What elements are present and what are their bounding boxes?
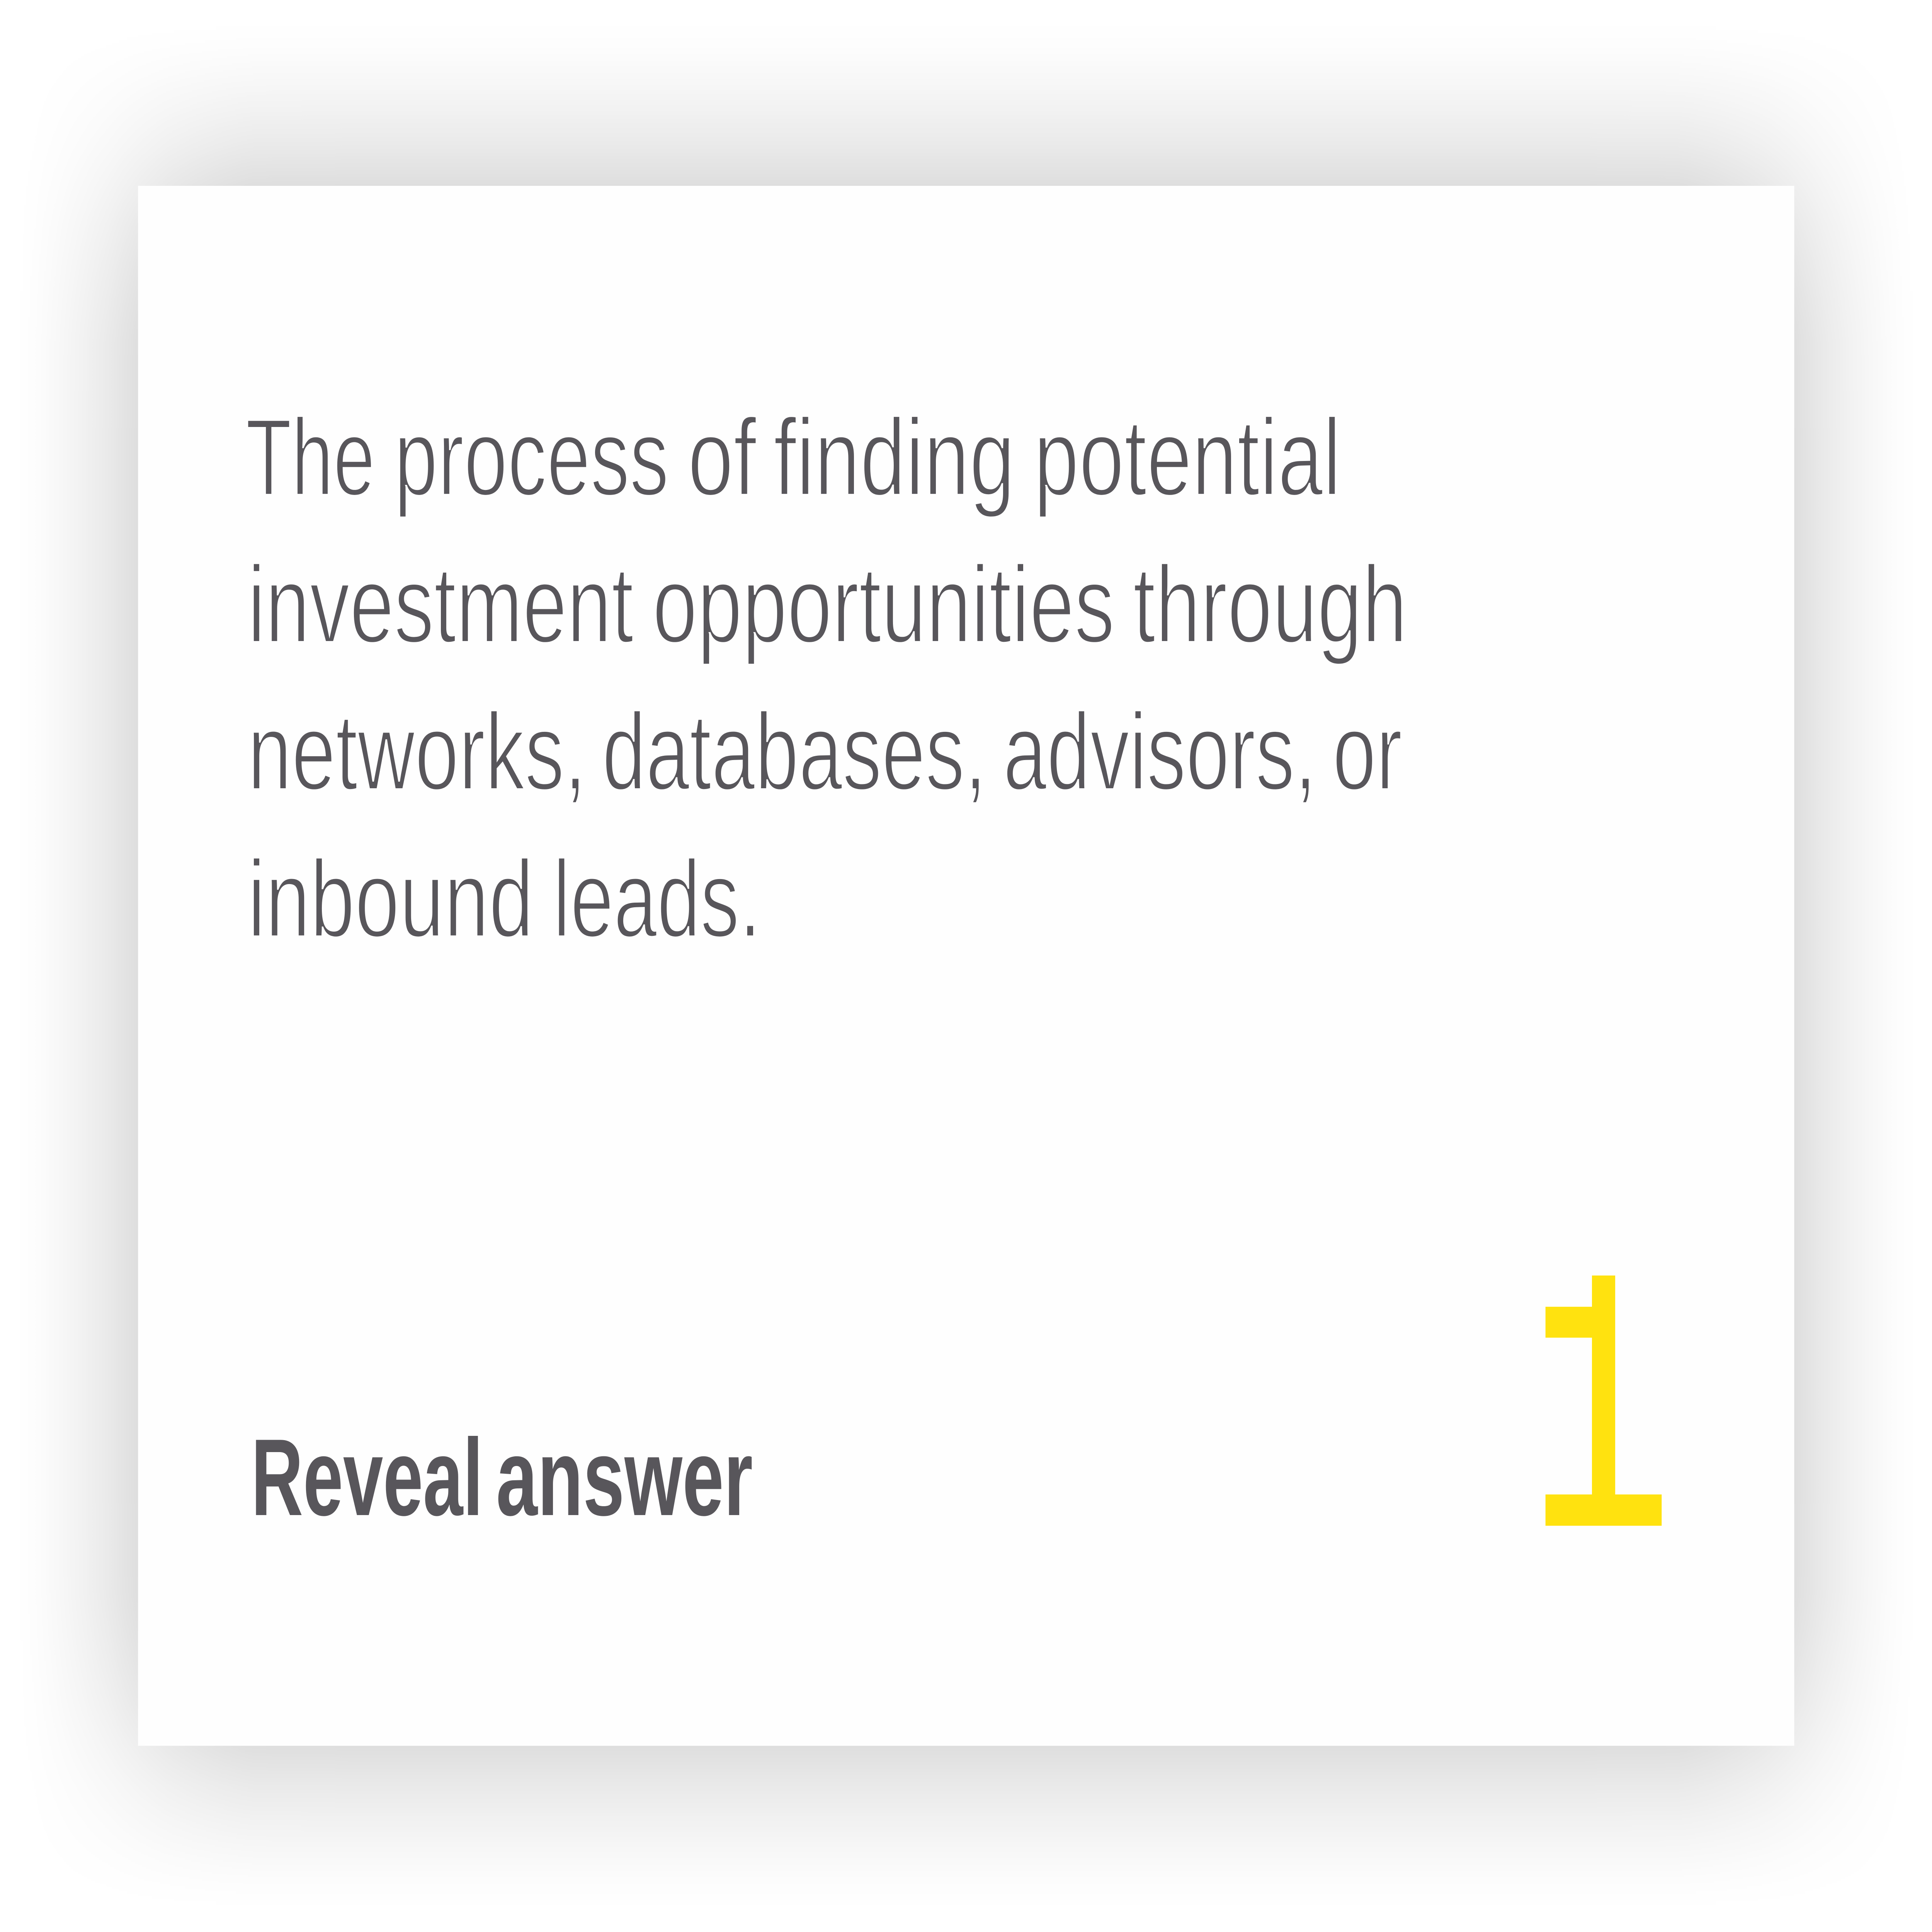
text block: definition: opportunities <box>653 543 1115 665</box>
text block: definition: databases, <box>602 690 986 813</box>
text block: definition: networks, <box>248 690 586 813</box>
text block: definition: inbound <box>248 837 534 960</box>
text block: definition: of <box>688 396 757 518</box>
reveal answer label <box>251 1416 753 1538</box>
text block: definition: leads. <box>553 837 761 960</box>
text block: definition: through <box>1133 543 1407 665</box>
text block: definition <box>246 396 1407 960</box>
text block: definition: The <box>246 396 375 518</box>
reveal answer label: answer <box>496 1416 753 1538</box>
text block: definition: investment <box>248 543 634 665</box>
panel: white card <box>138 186 1794 1746</box>
text block: definition: advisors, <box>1003 690 1316 813</box>
card number 1 <box>1546 1276 1662 1526</box>
text block: definition: potential <box>1034 396 1341 518</box>
reveal answer label: Reveal <box>251 1416 483 1538</box>
text block: definition: finding <box>774 396 1015 518</box>
text block: definition: process <box>394 396 669 518</box>
text block: definition: or <box>1333 690 1402 813</box>
